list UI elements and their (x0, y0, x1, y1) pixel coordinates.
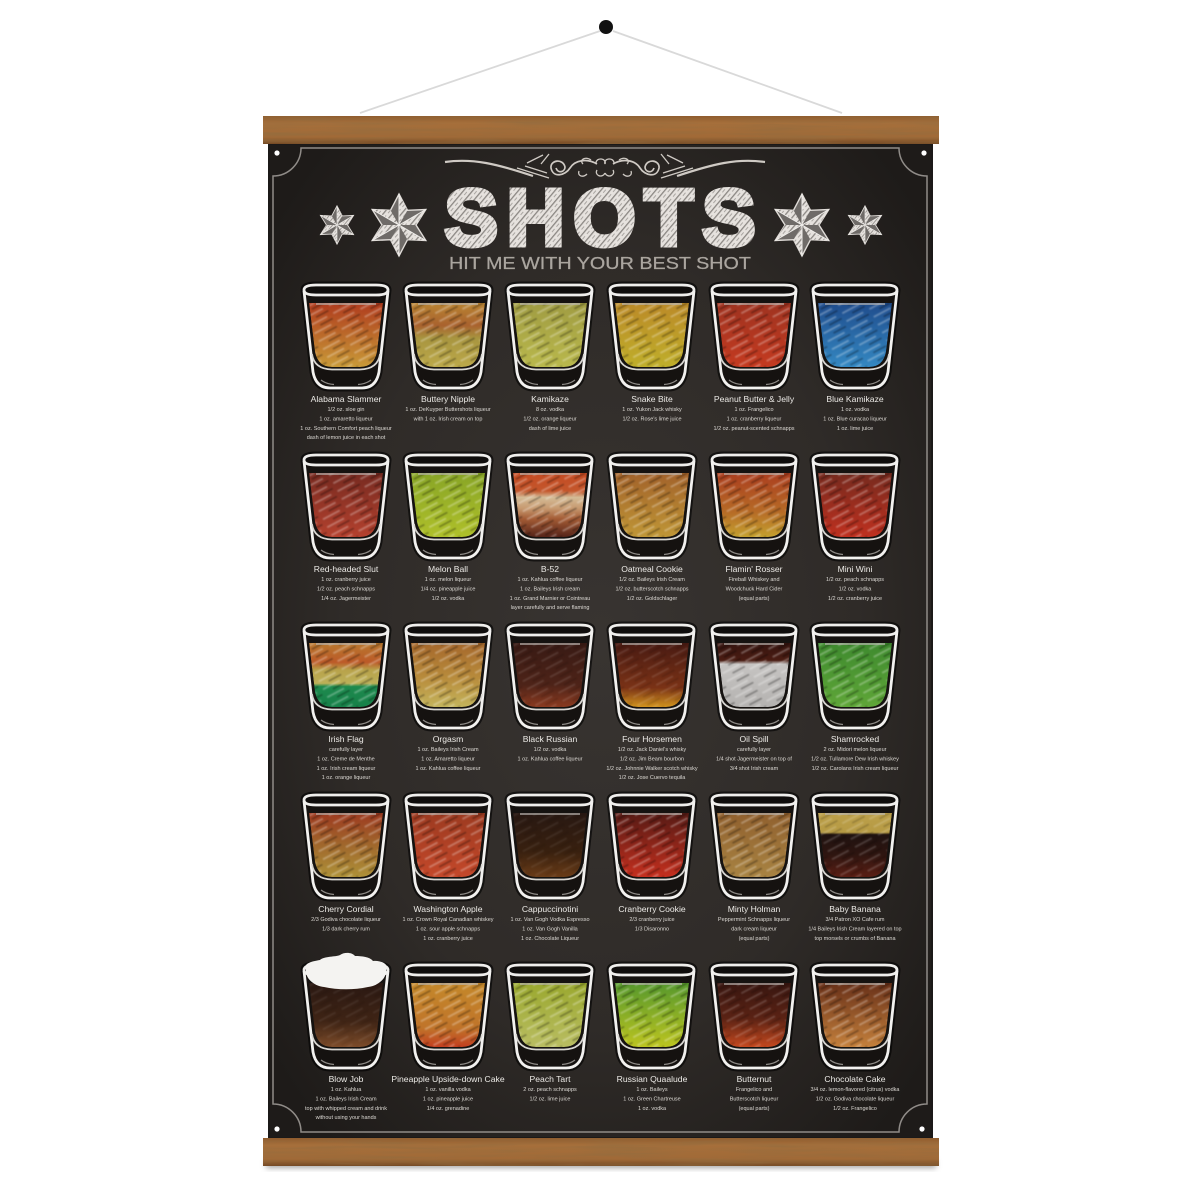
recipe: 1/2 oz. vodka (432, 596, 465, 602)
recipe: dash of lime juice (529, 426, 571, 432)
shot: Peanut Butter & Jelly (712, 285, 796, 432)
shot: Red-headed Slut (304, 455, 388, 602)
recipe: 1 oz. Van Gogh Vanilla (522, 926, 579, 932)
recipe: Frangelico and (736, 1087, 772, 1093)
recipe: 1/2 oz. Baileys Irish Cream (619, 577, 685, 583)
recipe: dash of lemon juice in each shot (307, 435, 386, 441)
recipe: 1/2 oz. Frangelico (833, 1106, 877, 1112)
name: Mini Wini (838, 564, 873, 574)
name: Butternut (737, 1074, 772, 1084)
recipe: 2 oz. Midori melon liqueur (824, 747, 887, 753)
recipe: 1/2 oz. Godiva chocolate liqueur (816, 1096, 894, 1102)
recipe: 1/4 oz. pineapple juice (421, 586, 475, 592)
recipe: 1 oz. Kahlua coffee liqueur (517, 756, 583, 762)
recipe: 1/2 oz. peach schnapps (317, 586, 375, 592)
shot: Snake Bite (610, 285, 694, 422)
recipe: 1/4 oz. Jagermeister (321, 596, 371, 602)
icon: large star right (775, 194, 829, 256)
ornament flourish (445, 154, 765, 178)
recipe: 1/2 oz. sloe gin (328, 407, 364, 413)
recipe: 1 oz. DeKuyper Buttershots liqueur (405, 407, 491, 413)
recipe: 1/2 oz. Johnnie Walker scotch whisky (606, 766, 698, 772)
shot: Buttery Nipple (405, 285, 491, 422)
recipe: 1 oz. cranberry juice (321, 577, 371, 583)
recipe: 8 oz. vodka (536, 407, 565, 413)
icon: large star left (372, 194, 426, 256)
shot: B-52 (508, 455, 592, 611)
recipe: 1 oz. Kahlua (331, 1087, 362, 1093)
name: Melon Ball (428, 564, 468, 574)
name: Shamrocked (831, 734, 879, 744)
recipe: 1/3 Disaronno (635, 926, 669, 932)
recipe: 1/2 oz. vodka (839, 586, 872, 592)
recipe: 1 oz. Grand Marnier or Cointreau (510, 596, 590, 602)
recipe: 1 oz. Kahlua coffee liqueur (517, 577, 583, 583)
recipe: 1/2 oz. butterscotch schnapps (615, 586, 689, 592)
recipe: (equal parts) (739, 596, 770, 602)
recipe: 1/2 oz. Goldschlager (627, 596, 677, 602)
recipe: 1 oz. Irish cream liqueur (317, 766, 376, 772)
name: Irish Flag (328, 734, 364, 744)
recipe: Woodchuck Hard Cider (726, 586, 783, 592)
recipe: Peppermint Schnapps liqueur (718, 917, 790, 923)
recipe: 1 oz. melon liqueur (425, 577, 471, 583)
recipe: carefully layer (737, 747, 771, 753)
shot: Russian Quaalude (610, 965, 694, 1112)
recipe: Fireball Whiskey and (728, 577, 780, 583)
recipe: with 1 oz. Irish cream on top (413, 416, 482, 422)
recipe: 1/2 oz. orange liqueur (523, 416, 577, 422)
name: Cappuccinotini (522, 904, 578, 914)
shot: Cappuccinotini (508, 795, 592, 942)
recipe: 1/2 oz. Tullamore Dew Irish whiskey (811, 756, 899, 762)
recipe: 1 oz. Baileys Irish Cream (315, 1096, 377, 1102)
recipe: 1/3 dark cherry rum (322, 926, 370, 932)
shot: Chocolate Cake (811, 965, 900, 1112)
recipe: 1 oz. Baileys (636, 1087, 668, 1093)
recipe: 1 oz. amaretto liqueur (319, 416, 373, 422)
shot: Shamrocked (811, 625, 899, 772)
recipe: top morsels or crumbs of Banana (814, 936, 896, 942)
recipe: 1/2 oz. Jim Beam bourbon (620, 756, 684, 762)
name: Kamikaze (531, 394, 569, 404)
name: Four Horsemen (622, 734, 682, 744)
shot: Oil Spill (712, 625, 796, 772)
top wooden rail (263, 116, 939, 144)
icon: small star right (848, 206, 882, 244)
shot: Washington Apple (402, 795, 494, 942)
recipe: layer carefully and serve flaming (511, 605, 589, 611)
shot: Kamikaze (508, 285, 592, 432)
whipped cream foam (305, 953, 387, 989)
recipe: 1 oz. vodka (841, 407, 870, 413)
title: SHOTS (444, 173, 756, 262)
subtitle: HIT ME WITH YOUR BEST SHOT (449, 253, 751, 273)
name: B-52 (541, 564, 559, 574)
shot: Peach Tart (508, 965, 592, 1102)
recipe: 1/2 oz. cranberry juice (828, 596, 882, 602)
recipe: 1 oz. Southern Comfort peach liqueur (300, 426, 392, 432)
name: Cranberry Cookie (618, 904, 686, 914)
name: Cherry Cordial (318, 904, 374, 914)
recipe: 1 oz. vanilla vodka (425, 1087, 472, 1093)
recipe: without using your hands (315, 1115, 377, 1121)
recipe: 2 oz. peach schnapps (523, 1087, 577, 1093)
pin (599, 20, 613, 34)
recipe: 3/4 oz. lemon-flavored (citrus) vodka (811, 1087, 900, 1093)
name: Russian Quaalude (617, 1074, 688, 1084)
recipe: 1/4 shot Jagermeister on top of (716, 756, 792, 762)
recipe: 1 oz. sour apple schnapps (416, 926, 480, 932)
shot: Flamin' Rosser (712, 455, 796, 602)
recipe: 1 oz. vodka (638, 1106, 667, 1112)
name: Orgasm (433, 734, 463, 744)
hanging string (360, 31, 842, 113)
shot: Blue Kamikaze (813, 285, 897, 432)
shot: Pineapple Upside-down Cake (391, 965, 505, 1112)
recipe: 1 oz. Baileys Irish Cream (417, 747, 479, 753)
recipe: 1 oz. Green Chartreuse (623, 1096, 681, 1102)
recipe: 1 oz. Yukon Jack whisky (622, 407, 682, 413)
name: Flamin' Rosser (725, 564, 783, 574)
recipe: 2/3 Godiva chocolate liqueur (311, 917, 381, 923)
name: Blow Job (329, 1074, 364, 1084)
recipe: 1 oz. Kahlua coffee liqueur (415, 766, 481, 772)
recipe: 1 oz. pineapple juice (423, 1096, 473, 1102)
name: Peanut Butter & Jelly (714, 394, 795, 404)
recipe: (equal parts) (739, 1106, 770, 1112)
recipe: 1 oz. orange liqueur (322, 775, 370, 781)
recipe: 1/2 oz. peanut-scented schnapps (713, 426, 795, 432)
shot: Minty Holman (712, 795, 796, 942)
poster board (268, 143, 933, 1139)
name: Peach Tart (530, 1074, 571, 1084)
shot: Cherry Cordial (304, 795, 388, 932)
icon: small star left (320, 206, 354, 244)
recipe: 1/2 oz. Jose Cuervo tequila (619, 775, 686, 781)
recipe: 1 oz. cranberry juice (423, 936, 473, 942)
name: Black Russian (523, 734, 577, 744)
name: Minty Holman (728, 904, 780, 914)
recipe: 1 oz. Chocolate Liqueur (521, 936, 579, 942)
recipe: 1 oz. Blue curacao liqueur (823, 416, 887, 422)
recipe: dark cream liqueur (731, 926, 777, 932)
recipe: Butterscotch liqueur (730, 1096, 778, 1102)
shot: Irish Flag (304, 625, 388, 781)
recipe: 1 oz. Baileys Irish cream (520, 586, 580, 592)
name: Buttery Nipple (421, 394, 475, 404)
shot: Four Horsemen (606, 625, 698, 781)
name: Red-headed Slut (314, 564, 379, 574)
recipe: 1/4 Baileys Irish Cream layered on top (808, 926, 902, 932)
name: Oatmeal Cookie (621, 564, 683, 574)
shot: Orgasm (406, 625, 490, 772)
name: Baby Banana (829, 904, 881, 914)
shot: Alabama Slammer (300, 285, 392, 441)
shot: Baby Banana (808, 795, 902, 942)
recipe: 1 oz. Frangelico (734, 407, 774, 413)
shot: Black Russian (508, 625, 592, 762)
name: Pineapple Upside-down Cake (391, 1074, 505, 1084)
recipe: 1 oz. Creme de Menthe (317, 756, 375, 762)
name: Washington Apple (414, 904, 483, 914)
recipe: top with whipped cream and drink (305, 1106, 387, 1112)
bottom wooden rail (263, 1138, 939, 1168)
recipe: 1/2 oz. Carolans Irish cream liqueur (812, 766, 899, 772)
name: Oil Spill (739, 734, 769, 744)
name: Chocolate Cake (824, 1074, 886, 1084)
shot: Cranberry Cookie (610, 795, 694, 932)
shot: Butternut (712, 965, 796, 1112)
shot: Oatmeal Cookie (610, 455, 694, 602)
recipe: 1/2 oz. peach schnapps (826, 577, 884, 583)
recipe: 1 oz. lime juice (837, 426, 873, 432)
recipe: 1/2 oz. Jack Daniel's whisky (618, 747, 686, 753)
name: Snake Bite (631, 394, 673, 404)
recipe: 3/4 Patron XO Cafe rum (826, 917, 885, 923)
recipe: 1 oz. cranberry liqueur (727, 416, 782, 422)
recipe: 1/4 oz. grenadine (427, 1106, 469, 1112)
recipe: 1/2 oz. Rose's lime juice (622, 416, 682, 422)
name: Alabama Slammer (311, 394, 381, 404)
shot: Mini Wini (813, 455, 897, 602)
name: Blue Kamikaze (826, 394, 884, 404)
shot: Blow Job (304, 953, 388, 1121)
recipe: 1 oz. Van Gogh Vodka Espresso (510, 917, 590, 923)
recipe: 1/2 oz. lime juice (530, 1096, 570, 1102)
shot: Melon Ball (406, 455, 490, 602)
recipe: carefully layer (329, 747, 363, 753)
recipe: 1 oz. Crown Royal Canadian whiskey (402, 917, 494, 923)
recipe: 1 oz. Amaretto liqueur (421, 756, 475, 762)
recipe: 2/3 cranberry juice (629, 917, 675, 923)
recipe: 1/2 oz. vodka (534, 747, 567, 753)
recipe: 3/4 shot Irish cream (730, 766, 779, 772)
recipe: (equal parts) (739, 936, 770, 942)
